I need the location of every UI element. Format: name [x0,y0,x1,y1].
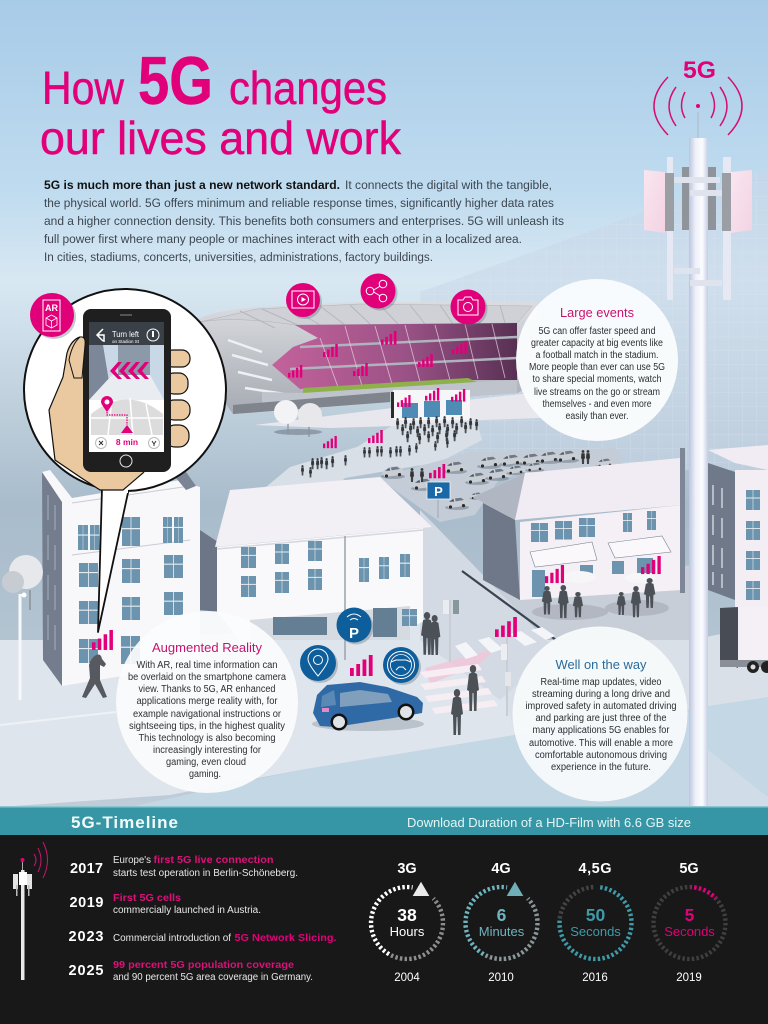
timeline entries: 99 percent 5G population coverage [113,959,294,971]
icon: map pin [300,645,338,683]
title: changes [229,62,387,114]
parking lot [378,448,625,522]
callout: augmented reality: applications merge reality with, for [136,696,278,707]
intro paragraph: full power first where many people or machines interact with each other in a localized area. [44,232,522,246]
title: 5G [138,43,213,119]
dial: 3G: Hours [390,924,425,939]
timeline entries: commercially launched in Austria. [113,905,261,916]
timeline entries: 2025 [68,963,104,979]
callout: large events: Large events [560,305,634,320]
intro paragraph [44,178,564,264]
dark footer panel [0,835,768,1024]
dial: 3G: 3G [397,861,417,877]
cafe terrace with guests [462,571,669,640]
callout: large events: 5G can offer faster speed and [538,326,656,337]
timeline entries: starts test operation in Berlin-Schöneberg. [113,868,298,879]
icon: play video [286,283,322,319]
stadium [198,302,537,414]
sky and background [0,0,768,807]
thumb [69,337,85,378]
phone: Turn left [112,330,140,339]
tree and street lamp on the left [2,555,43,700]
phone: 8 min [116,437,138,447]
callout: well on the way: comfortable autonomous driving [535,750,667,761]
hand [49,337,190,490]
mini 5G tower icon [13,842,48,980]
plaza walkway [266,415,482,488]
street ground surfaces [0,510,768,807]
callout: well on the way [512,626,688,802]
crowd [301,416,478,478]
callout: large events [516,279,678,441]
callout: well on the way: experience in the future. [551,762,651,773]
callout: well on the way: many applications 5G enables for [532,725,670,736]
intro paragraph: and a higher connection density. This benefits both consumers and enterprises. 5G will unleash its [44,214,564,228]
timeline entries: and 90 percent 5G area coverage in Germany. [113,972,313,983]
icon: smart parking [336,608,374,644]
icon: smart parking: P [349,625,359,642]
callout: large events: a football match in the stadium. [536,350,658,361]
5G signal label and waves [654,57,742,135]
dial: 4,5G: 2016 [582,972,608,984]
callout: augmented reality: example navigational instructions or [133,709,282,720]
building: left [42,470,200,686]
dial: 4,5G: Seconds [570,924,621,939]
title: How [42,62,125,114]
dial: 4G: 4G [491,861,511,877]
callout: well on the way: Real-time map updates, video [540,677,662,688]
timeline entries: 2019 [70,895,104,911]
callout: large events: themselves - and even more [542,399,652,410]
icon: share [360,274,398,310]
dial: 5G: 5G [679,861,699,877]
truck [720,607,768,673]
dial: 5G: 2019 [676,972,702,984]
callout: well on the way: and parking are just three of the [536,713,667,724]
icon: camera [450,290,488,326]
dial: 4G: 6 [497,905,507,925]
callout: augmented reality: be overlaid on the smartphone camera [128,672,286,683]
callout: augmented reality: increasingly interesting for [153,745,262,756]
timeline entries: first 5G live connection [154,854,274,866]
timeline entries: 5G Network Slicing. [234,932,337,944]
building: middle [200,477,432,660]
callout: augmented reality: Augmented Reality [152,640,262,655]
dial: 3G: 2004 [394,972,420,984]
timeline entries: Commercial introduction of [113,933,231,944]
augmented reality phone lens [24,289,226,632]
pale forecourt below stadium [255,392,540,428]
building: right cafe building [473,448,685,600]
tree near stadium [274,400,322,437]
tower [644,104,752,807]
dial: 3G: 38 [397,905,417,925]
icon: steering wheel [383,647,421,685]
dial: 4G [466,861,538,984]
title [40,43,402,164]
dial: 5G [654,861,726,984]
callout: large events: More people than ever can use 5G [529,362,665,373]
timeline entries: 2023 [68,929,104,945]
timeline header band [0,806,768,835]
parking sign [427,482,450,518]
timeline entries [68,854,337,983]
icon: AR badge [30,293,76,339]
callout: large events: to share special moments, watch [532,374,662,385]
intro paragraph: the physical world. 5G offers minimum and reliable response times, significantly higher data rates [44,196,554,210]
building: far right [708,445,768,608]
dial: 3G [371,861,443,984]
callout: augmented reality: gaming, even cloud [166,757,246,768]
timeline entries: First 5G cells [113,892,181,904]
callout: well on the way: improved safety in automated driving [526,701,676,712]
title: our lives and work [40,112,402,164]
callout: augmented reality: view. Thanks to 5G, AR enhanced [138,684,276,695]
timeline entries: Europe's [113,855,151,866]
dial: 4,5G: 4,5G [578,861,612,877]
stadium video wall [391,390,470,420]
intro paragraph: 5G is much more than just a new network standard. [44,178,340,192]
5G signal label and waves: 5G [683,57,716,84]
callout: large events: greater capacity at big events like [531,338,663,349]
dial: 4G: 2010 [488,972,514,984]
icon: AR badge: AR [45,303,58,313]
pedestrian with phone [82,654,107,698]
dial: 4,5G: 50 [586,905,605,925]
pedestrians [421,612,479,735]
phone: on Stadion St [112,339,140,344]
timeline header band: 5G-Timeline [71,813,178,832]
callout: augmented reality: sightseeing tips, in the highest quality [129,721,285,732]
dial: 5G: Seconds [664,924,715,939]
callout: well on the way: streaming during a long drive and [532,689,670,700]
timeline entries: 2017 [70,861,103,877]
dial: 5G: 5 [685,905,695,925]
callout: augmented reality: This technology is also becoming [138,733,276,744]
car [312,682,424,731]
timeline header band: Download Duration of a HD-Film with 6.6 GB size [407,815,691,830]
dial: 4,5G [560,861,632,984]
callout: large events: live streams on the go or stream [534,387,660,398]
zebra crossing [420,627,555,714]
parking sign: P [434,484,443,499]
callout: augmented reality: With AR, real time information can [136,660,278,671]
intro paragraph: In cities, stadiums, concerts, universities, administrations, factory buildings. [44,250,433,264]
callout: large events: easily than ever. [566,411,628,422]
traffic lights [443,600,511,716]
phone [83,309,171,472]
callout: augmented reality [116,611,298,793]
callout: augmented reality: gaming. [189,769,221,780]
callout: well on the way: automotive. This will enable a more [529,738,673,749]
callout: well on the way: Well on the way [556,657,647,672]
signal strength bars [92,331,661,676]
intro paragraph: It connects the digital with the tangible, [345,178,552,192]
dial: 4G: Minutes [479,924,525,939]
